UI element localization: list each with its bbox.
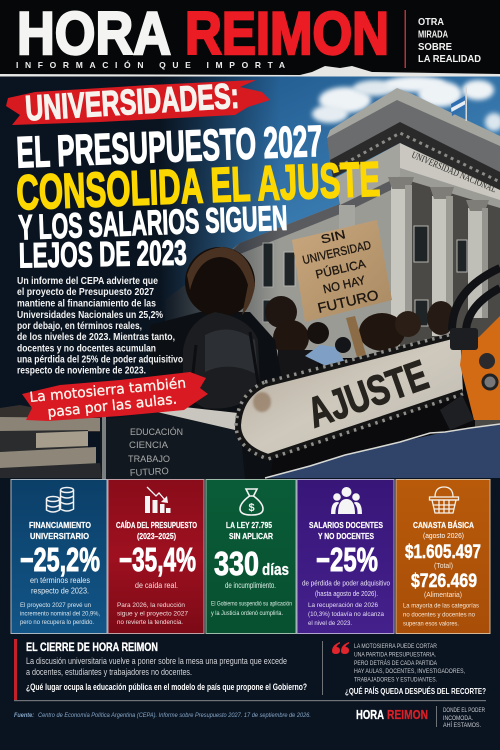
intro paragraph: una pérdida del 25% de poder adquisitivo [17, 354, 183, 366]
chainsaw motor [460, 316, 500, 420]
card note [211, 600, 292, 617]
intro paragraph: mantiene al financiamiento de las [17, 298, 156, 310]
card note: no docentes y docentes no [403, 612, 475, 618]
closing text [26, 656, 287, 677]
torn white edge under masthead [0, 66, 500, 76]
card note: no revierte la tendencia. [117, 619, 183, 626]
card note: y la Justicia ordenó cumplirla. [211, 610, 283, 617]
intro paragraph [17, 275, 183, 376]
card note: La mayoría de las categorías [403, 602, 480, 610]
protest crowd [235, 296, 475, 478]
card heading [413, 520, 474, 540]
card heading [116, 520, 197, 541]
red brush banner: UNIVERSIDADES: UNIVERSIDADES: [24, 75, 240, 128]
stack of books [0, 405, 102, 478]
icon: people [331, 487, 362, 514]
placard: NO HAY [322, 273, 367, 296]
footer logo: REIMON [387, 707, 428, 722]
closing accent bar [14, 639, 17, 700]
card caption: (hasta agosto de 2026). [315, 589, 378, 598]
quote text: HAY AULAS, DOCENTES, INVESTIGADORES, [354, 668, 465, 675]
card figures [405, 542, 481, 599]
card note: El proyecto 2027 prevé un [20, 602, 91, 609]
card figures: (Total) [434, 563, 453, 570]
card caption: de pérdida de poder adquisitivo [302, 578, 390, 588]
footer logo [356, 706, 486, 729]
university building [165, 88, 500, 440]
intro paragraph: el proyecto de Presupuesto 2027 [17, 286, 154, 298]
red callout: motosierra: pasa por las aulas. [47, 391, 178, 421]
card heading: (2023–2025) [137, 531, 176, 541]
intro paragraph: respecto de noviembre de 2023. [17, 364, 146, 376]
quote text: PERO DETRÁS DE CADA PARTIDA [354, 658, 438, 667]
source line: Centro de Economía Política Argentina (CEPA). Informe sobre Presupuesto 2027. 17 de septiembre de 2026. [38, 712, 311, 719]
panel: salarios docentes [297, 480, 394, 634]
chainsaw [236, 268, 500, 459]
red brush banner: UNIVERSIDADES [6, 75, 270, 128]
footer slogan: AHÍ ESTAMOS. [443, 722, 481, 729]
card note [308, 602, 384, 627]
footer slogan: INCOMODA. [443, 716, 473, 722]
panel: ley 27.795 [206, 480, 296, 634]
header slogan [418, 17, 481, 65]
placard: UNIVERSIDAD [301, 238, 373, 267]
quote text: TRABAJADORES Y ESTUDIANTES. [354, 676, 437, 684]
panel: canasta basica [396, 480, 490, 634]
footer slogan [443, 708, 486, 729]
card figure: −35,4% [119, 541, 196, 578]
intro paragraph: de los niveles de 2023. Mientras tanto, [17, 331, 175, 343]
chalkboard: TRABAJO [128, 454, 170, 465]
chain teeth [238, 334, 463, 457]
card caption: respecto de 2023. [31, 586, 89, 596]
card heading: CANASTA BÁSICA [413, 520, 474, 530]
placard: SIN [319, 227, 347, 247]
intro paragraph: Universidades Nacionales un 25,2% [17, 309, 164, 321]
card heading: CAÍDA DEL PRESUPUESTO [116, 520, 197, 530]
header masthead [0, 0, 500, 75]
closing text: La discusión universitaria vuelve a poner sobre la mesa una pregunta que excede [26, 656, 287, 666]
card caption: en términos reales [30, 576, 90, 585]
windows [214, 226, 467, 326]
closing question: ¿Qué lugar ocupa la educación pública en el modelo de país que propone el Gobierno? [26, 682, 307, 692]
intro paragraph: docentes y no docentes acumulan [17, 342, 156, 354]
card figures: $726.469 [411, 571, 477, 592]
sky with clouds [0, 75, 500, 315]
footer slogan: DONDE EL PODER [443, 708, 486, 714]
header slogan: OTRA [418, 17, 444, 28]
card caption: de caída real. [135, 581, 178, 590]
chalkboard [100, 406, 245, 480]
card figures: (Alimentaria) [424, 592, 462, 599]
header slogan: SOBRE [418, 42, 452, 53]
icon: quotation marks [332, 642, 349, 654]
quote text: UNA PARTIDA PRESUPUESTARIA. [354, 652, 436, 658]
quote text: LA MOTOSIERRA PUEDE CORTAR [354, 643, 437, 650]
chainsaw bar [238, 334, 463, 457]
placard: FUTURO [316, 286, 380, 316]
columns [339, 177, 489, 336]
card heading: LA LEY 27.795 [226, 520, 272, 530]
card figure: días [262, 560, 289, 579]
header slogan: LA REALIDAD [418, 54, 481, 65]
logo: HORA: HORA [17, 0, 171, 67]
chalkboard: EDUCACIÓN [130, 427, 183, 438]
card note: superan esos valores. [403, 620, 459, 628]
card caption: de incumplimiento. [225, 581, 276, 590]
chalkboard: CIENCIA [129, 440, 169, 451]
intro paragraph: Un informe del CEPA advierte que [17, 275, 158, 287]
quote block [322, 641, 486, 696]
headline: LEJOS DE 2023 [18, 234, 187, 275]
card note: incremento nominal del 20,9%, [20, 610, 100, 618]
placard [292, 220, 392, 368]
card note: el nivel de 2023. [308, 620, 352, 627]
closing panel [14, 639, 486, 701]
header slogan: MIRADA [418, 30, 448, 40]
header divider [404, 10, 406, 68]
icon: falling bar chart [145, 487, 170, 513]
headline: Y LOS SALARIOS SIGUEN [18, 199, 288, 247]
closing text: a docentes, estudiantes y trabajadores no docentes. [26, 667, 192, 677]
card note [403, 602, 480, 628]
placard: PÚBLICA [314, 256, 367, 282]
card figure: −25,2% [20, 541, 100, 578]
card note [20, 602, 100, 626]
student with backpack [150, 247, 283, 480]
icon: basket [430, 487, 458, 513]
intro paragraph: por debajo, en términos reales, [17, 320, 142, 332]
card caption [30, 576, 90, 596]
headline [15, 117, 381, 275]
card note: sigue y el proyecto 2027 [117, 610, 188, 618]
red callout: motosierra: La motosierra también [29, 376, 187, 406]
quote text [354, 643, 465, 684]
chainsaw label: AJUSTE [301, 351, 434, 436]
card heading: (agosto 2026) [423, 531, 464, 540]
card note: La recuperación de 2026 [308, 602, 378, 609]
card heading [29, 520, 91, 541]
card heading: SALARIOS DOCENTES [309, 520, 383, 530]
card note: pero no recupera lo perdido. [20, 619, 94, 626]
closing heading: EL CIERRE DE HORA REIMON [26, 642, 158, 654]
icon: coin stacks [46, 488, 74, 512]
torn paper corner [265, 424, 500, 478]
chainsaw handle [452, 268, 500, 330]
hero scene [0, 75, 500, 480]
card note: Para 2026, la reducción [117, 602, 185, 609]
panel: financiamiento universitario [11, 480, 107, 634]
rule under closing panel [14, 700, 486, 701]
card note: (10,3%) todavía no alcanza [308, 611, 384, 618]
dark left gradient overlay [0, 75, 500, 480]
source line: Fuente: [14, 712, 34, 719]
card figures: $1.605.497 [405, 542, 481, 563]
card heading: FINANCIAMIENTO [29, 520, 91, 530]
card heading: Y NO DOCENTES [318, 531, 374, 541]
card caption [302, 578, 390, 598]
card heading [309, 520, 383, 541]
chalkboard: FUTURO [130, 466, 169, 479]
panel: caida del presupuesto [108, 480, 204, 634]
card heading: SIN APLICAR [229, 531, 273, 541]
logo: REIMON: REIMON [185, 0, 389, 67]
tagline: INFORMACIÓN QUE IMPORTA [16, 59, 285, 70]
card heading [226, 520, 273, 541]
footer logo: HORA [356, 707, 384, 722]
card figure: 330 [214, 545, 259, 582]
card figure: −25% [316, 541, 378, 578]
icon: money bag [240, 489, 263, 515]
card note: El Gobierno suspendió su aplicación [211, 600, 292, 608]
card note [117, 602, 188, 626]
card heading: UNIVERSITARIO [30, 531, 89, 541]
flag [451, 87, 467, 121]
red callout: motosierra [22, 372, 208, 421]
icon: money bag: $ [248, 502, 255, 514]
